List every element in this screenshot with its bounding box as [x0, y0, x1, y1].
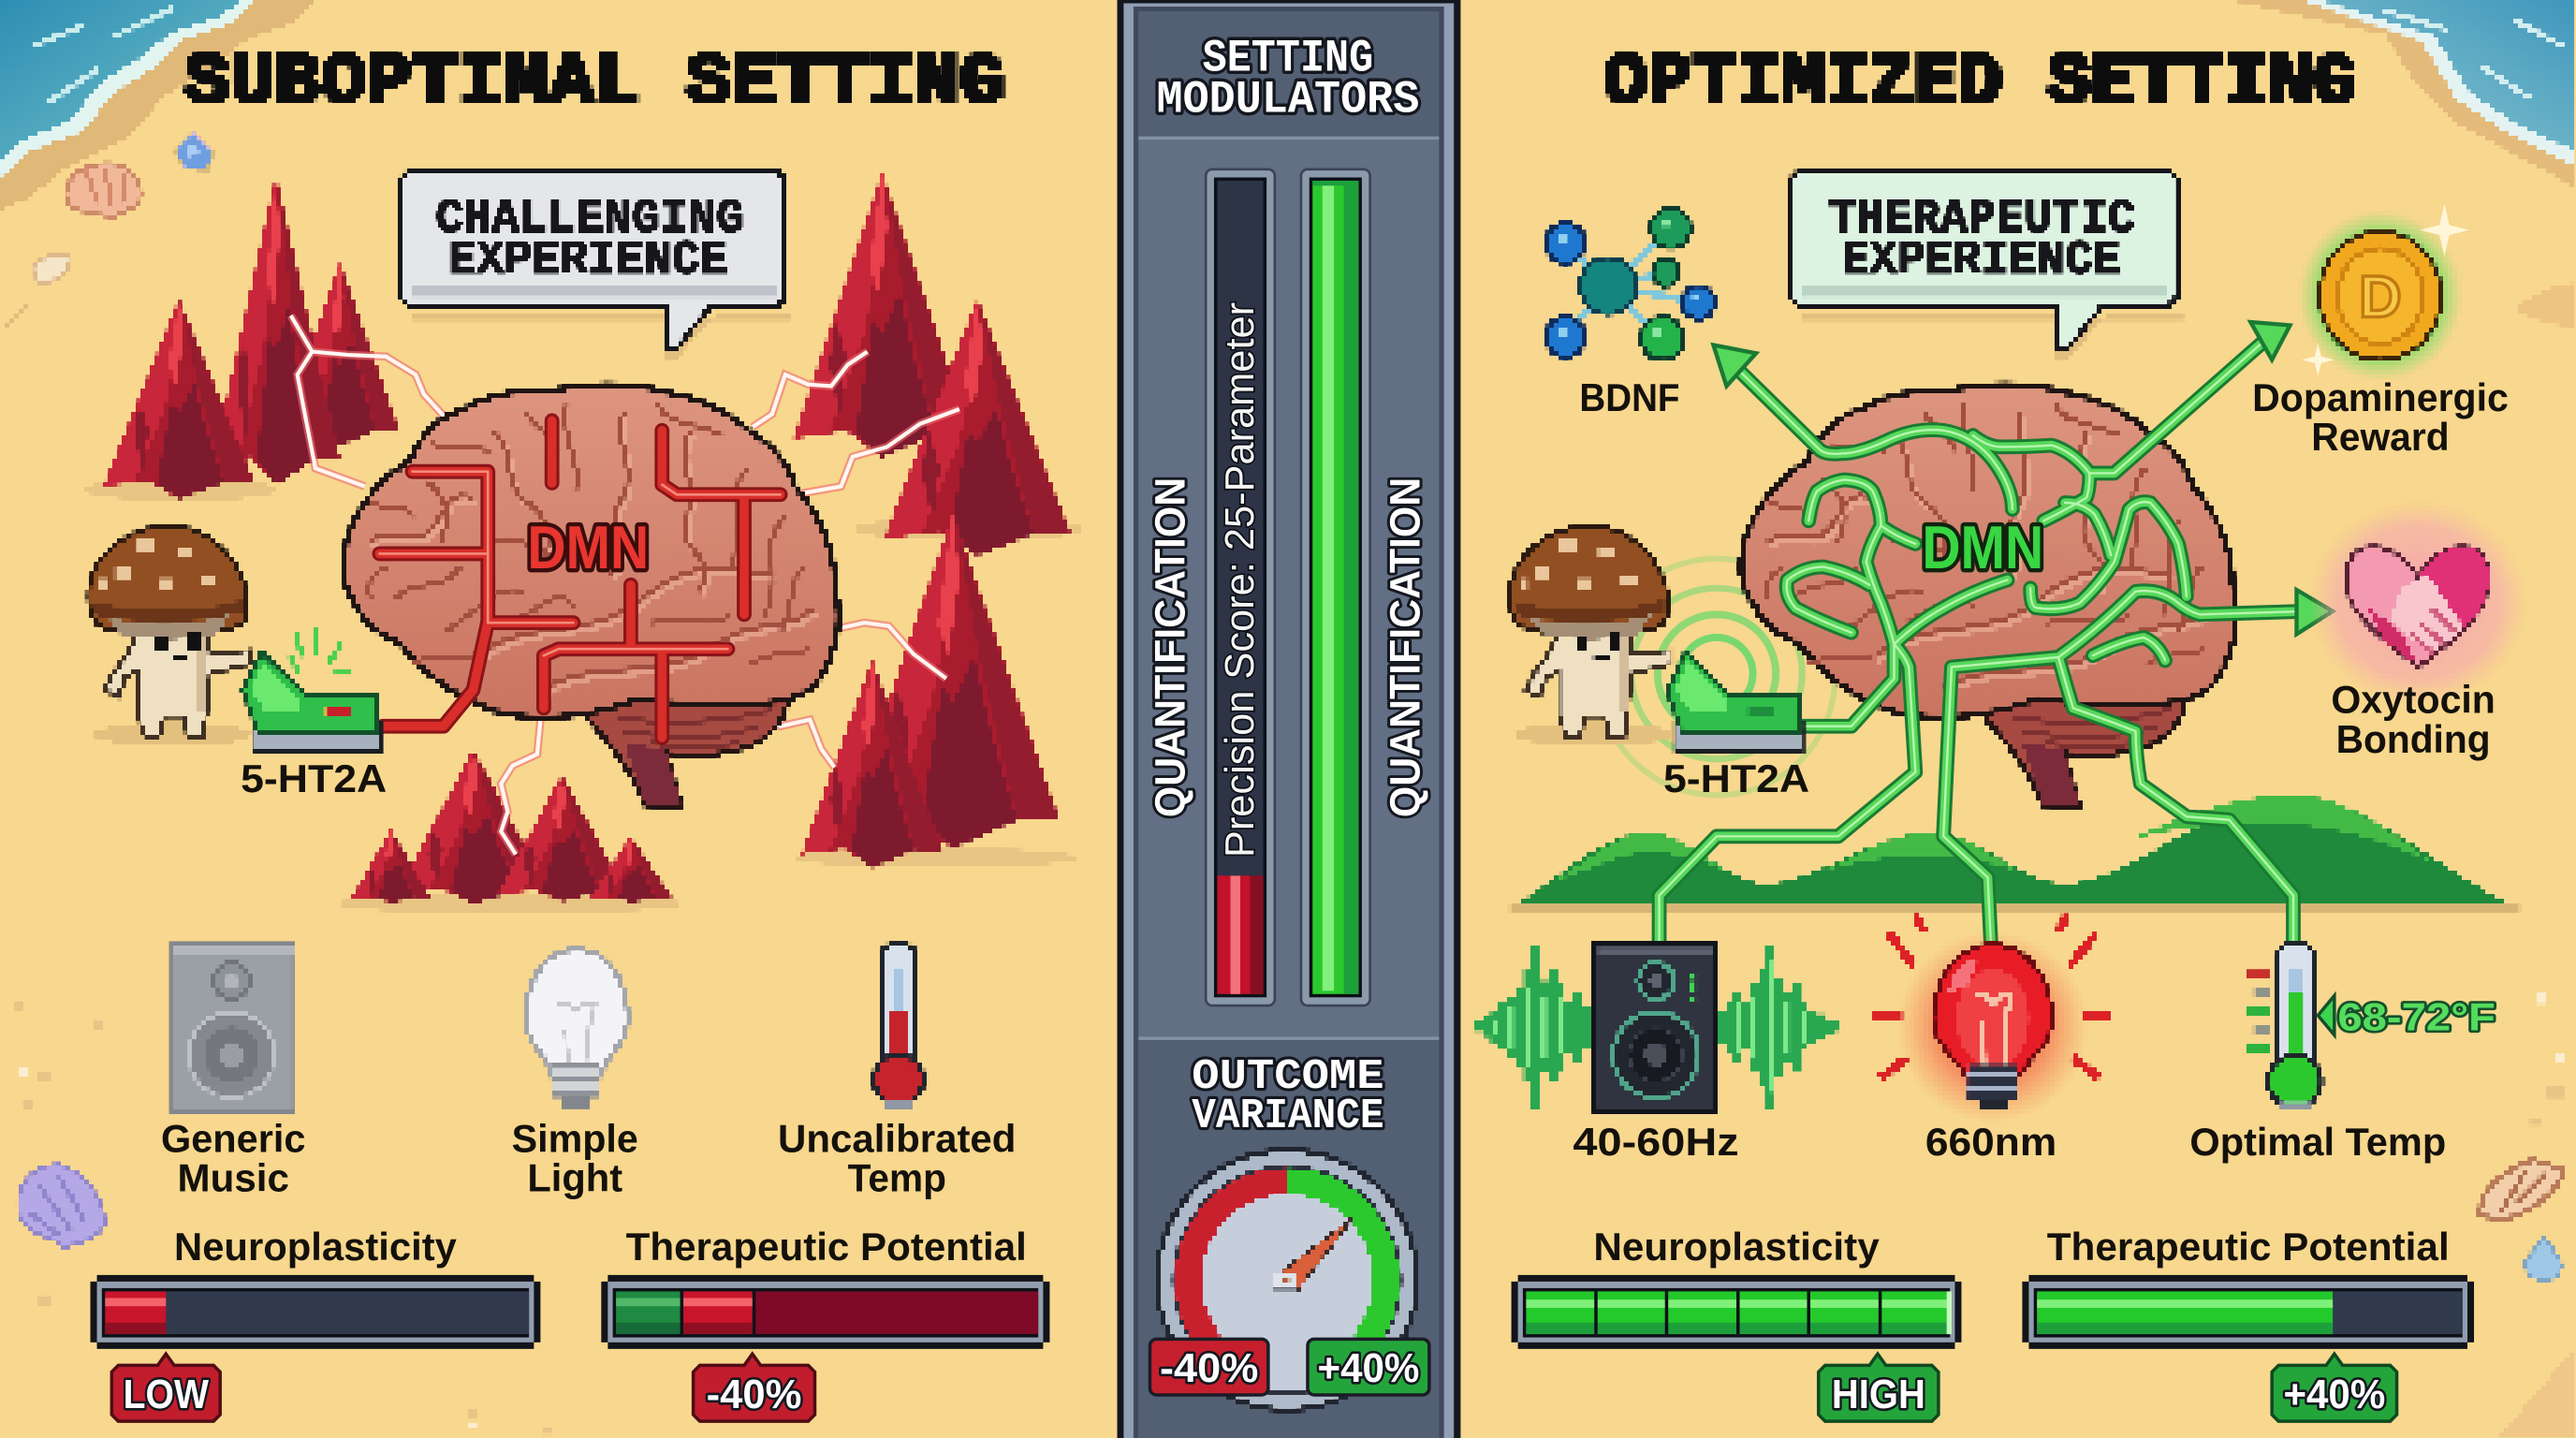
label: dopaminergic reward: Dopaminergic: [2252, 375, 2509, 419]
label: dopaminergic reward: Reward: [2311, 415, 2450, 459]
panel: optimized setting: [1479, 0, 2576, 1438]
flowing green network and arrows: [1660, 322, 2333, 946]
speech bubble: therapeutic experience: [1791, 169, 2183, 359]
green rolling hills: [1510, 795, 2520, 912]
label: neuroplasticity: Neuroplasticity: [1593, 1225, 1880, 1269]
label: generic music: Music: [178, 1155, 289, 1199]
beach decorations: shell and gem: [2481, 994, 2563, 1280]
brain with rigid pathways: [344, 385, 838, 807]
console frame: [1117, 0, 1460, 1438]
tag: high: HIGH: [1832, 1372, 1925, 1417]
icon: 5-HT2A switch active: [1667, 653, 1802, 751]
icon: red 660nm bulb: [1873, 916, 2111, 1123]
callout: 68-72°F: 68-72°F: [2337, 994, 2496, 1038]
label: simple light: Light: [527, 1155, 622, 1199]
icon: generic speaker: [172, 945, 294, 1110]
icon: signal rings: [1599, 559, 1835, 795]
speech bubble: therapeutic experience: EXPERIENCE: [1841, 234, 2121, 287]
tag: -40%: -40%: [707, 1372, 801, 1417]
tag: +40%: [2272, 1354, 2397, 1421]
icon: optimal thermometer: [2247, 945, 2321, 1110]
icon: oxytocin heart handshake: [2310, 501, 2526, 705]
sparkles: [2302, 204, 2469, 376]
label: uncalibrated temp: Temp: [848, 1155, 946, 1199]
red jagged mountains: [85, 172, 1084, 914]
speech bubble: challenging experience: EXPERIENCE: [448, 234, 727, 287]
icon: dark speaker: [1595, 945, 1717, 1110]
bar: therapeutic potential increased: [2022, 1275, 2474, 1349]
panel: setting modulators: [1117, 0, 1460, 1438]
arrow: to oxytocin: [2296, 590, 2333, 634]
label: simple light: [512, 1116, 638, 1199]
icon: sound waves: [1479, 945, 1837, 1109]
tag: gauge +40%: +40%: [1318, 1345, 1419, 1391]
label: BDNF: BDNF: [1579, 375, 1679, 419]
label: 5-HT2A: 5-HT2A: [241, 756, 387, 800]
precision meter: optimized: [1301, 169, 1370, 1005]
speech bubble: therapeutic experience: THERAPEUTIC: [1828, 193, 2136, 246]
label: oxytocin bonding: Oxytocin: [2331, 678, 2496, 722]
label: dopaminergic reward: [2252, 375, 2509, 459]
icon: 5-HT2A switch: [243, 627, 379, 751]
tag: +40%: +40%: [2283, 1372, 2385, 1417]
label: generic music: [161, 1116, 305, 1199]
bar: therapeutic potential reduced: [601, 1275, 1049, 1349]
heading: outcome variance: VARIANCE: [1192, 1092, 1384, 1140]
heading: outcome variance: OUTCOME: [1192, 1052, 1384, 1101]
brain label: DMN: DMN: [1922, 513, 2043, 581]
tag: high: [1819, 1354, 1939, 1421]
label: oxytocin bonding: Bonding: [2336, 717, 2491, 761]
icon: simple light bulb: [526, 949, 627, 1108]
heading: setting modulators: [1157, 32, 1419, 125]
label: uncalibrated temp: [778, 1116, 1016, 1199]
tag: gauge -40%: -40%: [1160, 1345, 1258, 1391]
label: neuroplasticity: Neuroplasticity: [174, 1225, 457, 1269]
vertical label: precision score: Precision Score: 25-Parameter: [1217, 302, 1263, 858]
vertical label: quantification left: QUANTIFICATION: [1146, 477, 1193, 817]
label: oxytocin bonding: [2331, 678, 2496, 761]
icon: mushroom character: [1510, 526, 1673, 746]
tag: low: LOW: [124, 1372, 209, 1417]
label: uncalibrated temp: Uncalibrated: [778, 1116, 1016, 1160]
label: therapeutic potential: Therapeutic Potential: [2047, 1225, 2450, 1269]
title: optimized setting: OPTIMIZED SETTING: [1603, 43, 2357, 125]
rigid red pipes: [379, 420, 781, 738]
icon: dopamine coin: [2298, 204, 2469, 381]
speech bubble: challenging experience: [401, 169, 792, 359]
label: 40-60Hz: 40-60Hz: [1573, 1120, 1739, 1164]
label: generic music: Generic: [161, 1116, 305, 1160]
brain label: DMN: DMN: [527, 513, 649, 581]
title: suboptimal setting: SUBOPTIMAL SETTING: [184, 43, 1005, 125]
icon: mushroom character: [89, 526, 252, 746]
label: therapeutic potential: Therapeutic Potential: [626, 1225, 1027, 1269]
speech bubble: challenging experience: CHALLENGING: [435, 193, 744, 246]
beach decorations: shells and gem: [0, 131, 550, 1434]
icon: BDNF molecule: [1545, 209, 1715, 360]
label: optimal temp: Optimal Temp: [2189, 1120, 2446, 1164]
heading: setting modulators: MODULATORS: [1157, 73, 1419, 125]
vertical label: quantification right: QUANTIFICATION: [1381, 477, 1428, 817]
label: simple light: Simple: [512, 1116, 638, 1160]
label: 5-HT2A: 5-HT2A: [1663, 756, 1809, 800]
beach corner: top left: [0, 0, 315, 211]
icon: dopamine coin: D: [2359, 265, 2402, 330]
heading: outcome variance: [1192, 1052, 1384, 1140]
tag: -40%: [694, 1354, 814, 1421]
brain with flowing network: [1741, 385, 2236, 807]
panel: suboptimal setting: [0, 0, 1084, 1434]
lightning cracks: [291, 315, 959, 855]
label: 660nm: 660nm: [1925, 1120, 2056, 1164]
heading: setting modulators: SETTING: [1203, 32, 1373, 84]
bar: neuroplasticity low: [91, 1275, 540, 1349]
bar: neuroplasticity high: [1512, 1275, 1961, 1349]
gauge: outcome variance: [1157, 1150, 1417, 1410]
tag: low: [111, 1354, 220, 1421]
icon: uncalibrated thermometer: [874, 945, 923, 1110]
tag: gauge -40%: [1149, 1339, 1268, 1395]
beach corner: top right: [2230, 0, 2576, 1438]
precision meter: suboptimal: [1206, 169, 1275, 1005]
arrow: to dopamine: [2250, 322, 2290, 360]
arrow: to BDNF: [1713, 345, 1756, 386]
